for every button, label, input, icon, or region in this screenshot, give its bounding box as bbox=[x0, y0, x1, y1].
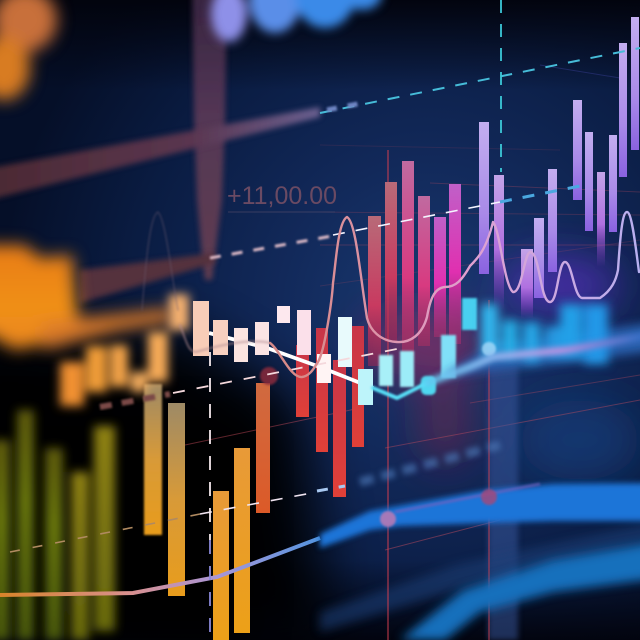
vertical dashed markers bbox=[210, 0, 501, 640]
blurred cyan candles bbox=[481, 304, 608, 364]
white trend line segment bbox=[209, 333, 373, 388]
blurred wide trend band bbox=[440, 322, 640, 378]
background grid lines bbox=[185, 65, 640, 550]
dashed lines bbox=[10, 48, 640, 552]
oscillating curve bbox=[142, 212, 639, 377]
faint blurred dashes right bbox=[320, 521, 640, 632]
chart nodes bbox=[260, 342, 497, 527]
pale candles bbox=[193, 301, 352, 383]
pink bars bbox=[368, 161, 461, 366]
red vertical axes bbox=[388, 150, 489, 640]
big blue vertical column bbox=[488, 340, 518, 640]
middle trend line bbox=[373, 335, 640, 398]
blurred olive bars bbox=[0, 410, 115, 640]
top blurred blue blobs bbox=[211, 0, 382, 42]
main blue line bbox=[0, 483, 640, 595]
red lower bars bbox=[256, 326, 364, 513]
cyan candles bbox=[358, 298, 477, 405]
price label: +11,00.00 bbox=[227, 182, 337, 210]
blurred vertical column bbox=[192, 0, 227, 280]
blurred horizontal band bbox=[0, 107, 320, 202]
colour glow behind bars bbox=[365, 257, 640, 480]
orange bars bbox=[144, 384, 250, 640]
blurred orange candles bbox=[60, 294, 189, 406]
orange blurred series bbox=[0, 245, 172, 350]
lavender bars bbox=[479, 17, 639, 319]
blurred lower band bbox=[80, 253, 215, 303]
top blurred orange blob bbox=[0, 0, 57, 100]
lower blue line bbox=[400, 541, 640, 640]
